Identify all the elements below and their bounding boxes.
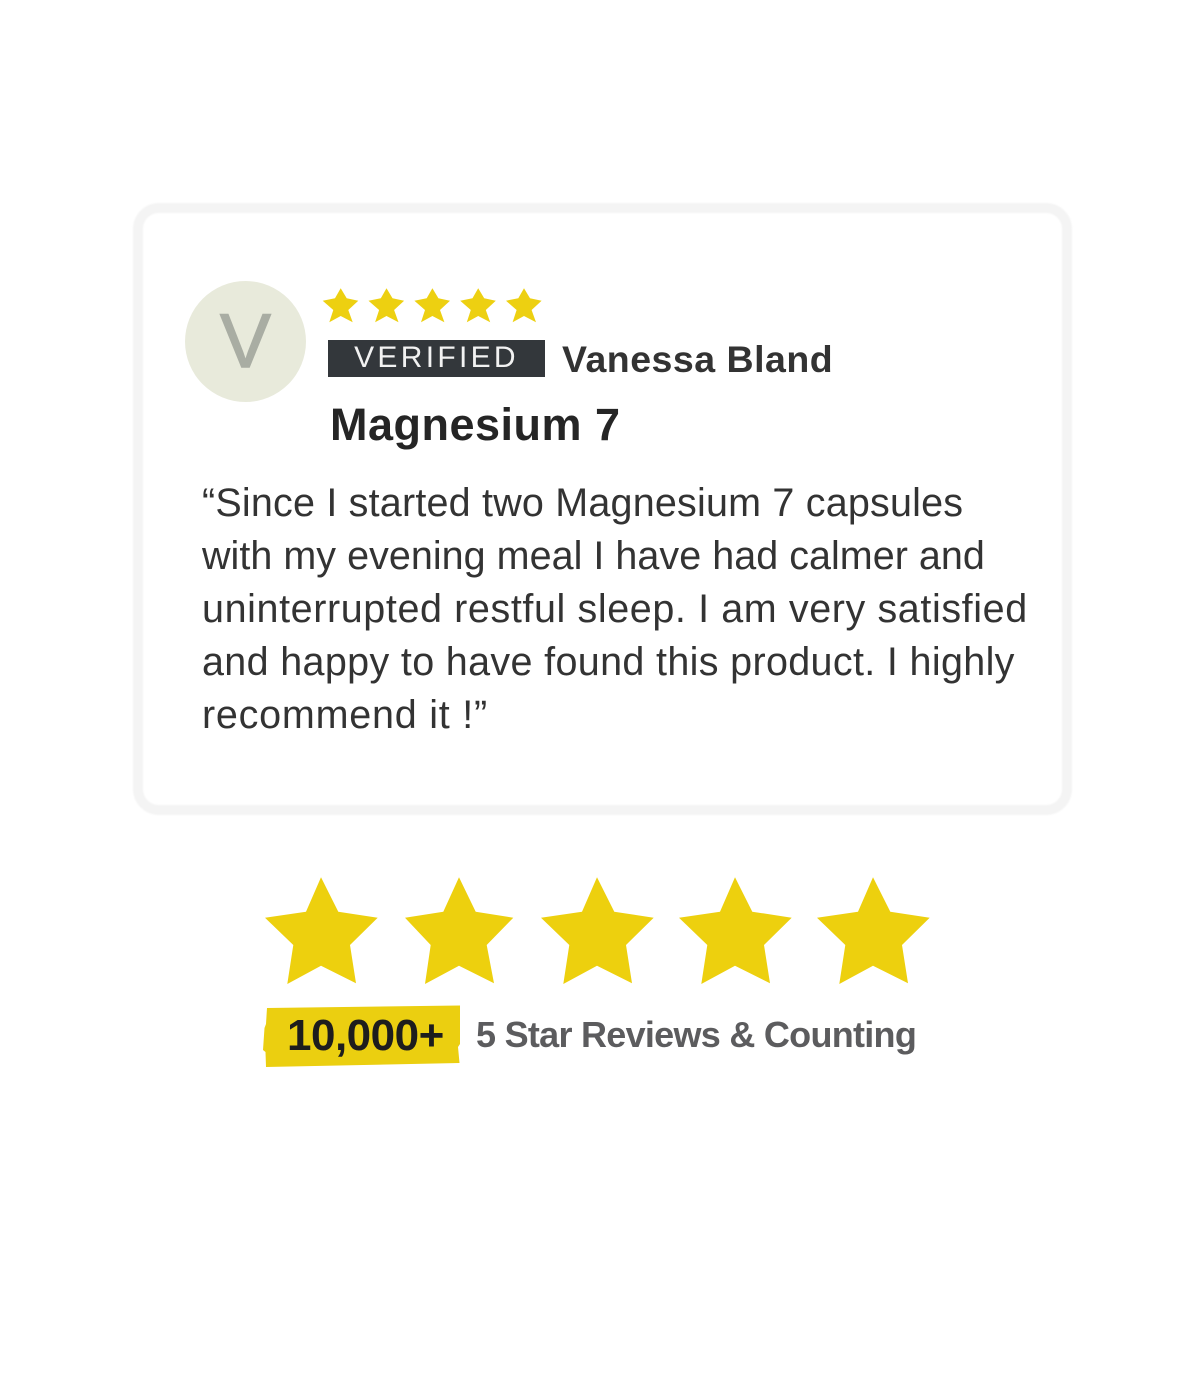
panel: review card [133, 203, 1072, 815]
verified badge [328, 340, 545, 377]
icon: small rating stars [322, 288, 542, 322]
icon: large rating stars [265, 877, 930, 984]
icon: yellow highlight swatch [263, 1006, 460, 1067]
review count: 10,000+ [287, 1011, 444, 1060]
review quote text: recommend it !” [202, 693, 488, 737]
icon: avatar circle: V [220, 299, 271, 384]
review quote text: and happy to have found this product. I highly [202, 640, 1015, 684]
icon: avatar circle [185, 281, 306, 402]
review count caption: 5 Star Reviews & Counting [476, 1014, 916, 1055]
review quote text: with my evening meal I have had calmer and [202, 534, 985, 578]
review quote text: uninterrupted restful sleep. I am very satisfied [202, 587, 1028, 631]
reviewer name: Vanessa Bland [562, 338, 833, 380]
verified badge: VERIFIED [354, 341, 519, 374]
review quote text [202, 481, 1028, 737]
review quote text: “Since I started two Magnesium 7 capsules [202, 481, 963, 525]
product name: Magnesium 7 [330, 399, 621, 450]
